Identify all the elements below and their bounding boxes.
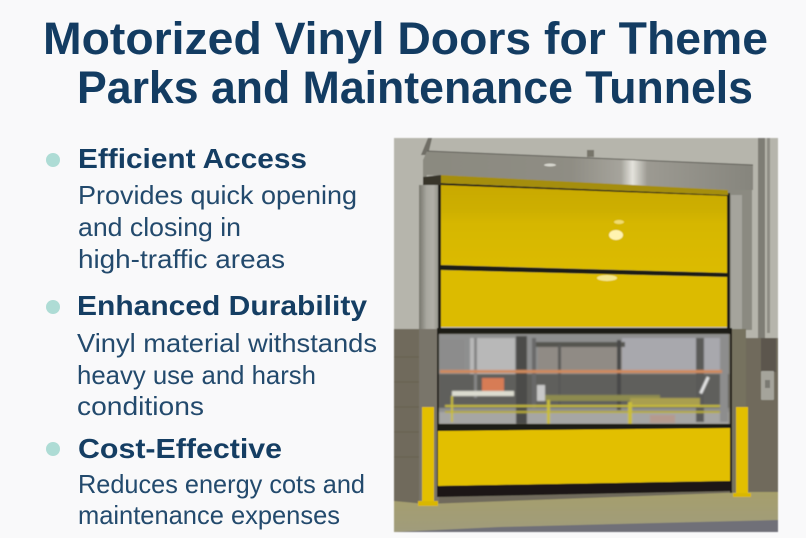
floor [394,492,778,532]
title: Motorized Vinyl Doors for Theme [43,13,768,64]
item: enhanced durability [46,290,377,421]
description [77,328,377,421]
feature list [46,143,377,530]
description: and closing in [78,212,241,242]
window [439,334,729,424]
bullet [46,300,60,314]
description: Reduces energy cots and [78,469,365,499]
description: conditions [77,391,204,421]
description: heavy use and harsh [77,360,316,390]
heading: Enhanced Durability [77,290,367,321]
heading: Efficient Access [78,143,307,174]
post right [733,407,751,497]
upper right wall [743,329,778,338]
yellow panel top [441,183,728,273]
description: high-traffic areas [78,244,285,274]
photo: yellow motorized vinyl door [394,138,778,532]
title: Parks and Maintenance Tunnels [77,62,753,113]
post left [418,407,438,506]
yellow panel middle [440,270,728,327]
side frames [419,185,441,330]
description: Vinyl material withstands [77,328,377,358]
bullet [46,442,60,456]
bottom bar [437,481,731,497]
item: efficient access [46,143,357,274]
description: maintenance expenses [78,500,340,530]
description [78,469,365,530]
description [78,180,357,274]
housing [423,151,753,190]
wall [394,138,778,532]
description: Provides quick opening [78,180,357,210]
title [43,13,768,113]
conduit and box [761,338,776,372]
door edges and bands [437,178,732,493]
bullet [46,153,60,167]
heading: Cost-Effective [78,433,282,464]
yellow panel bottom [437,424,732,431]
item: cost-effective [46,433,365,530]
